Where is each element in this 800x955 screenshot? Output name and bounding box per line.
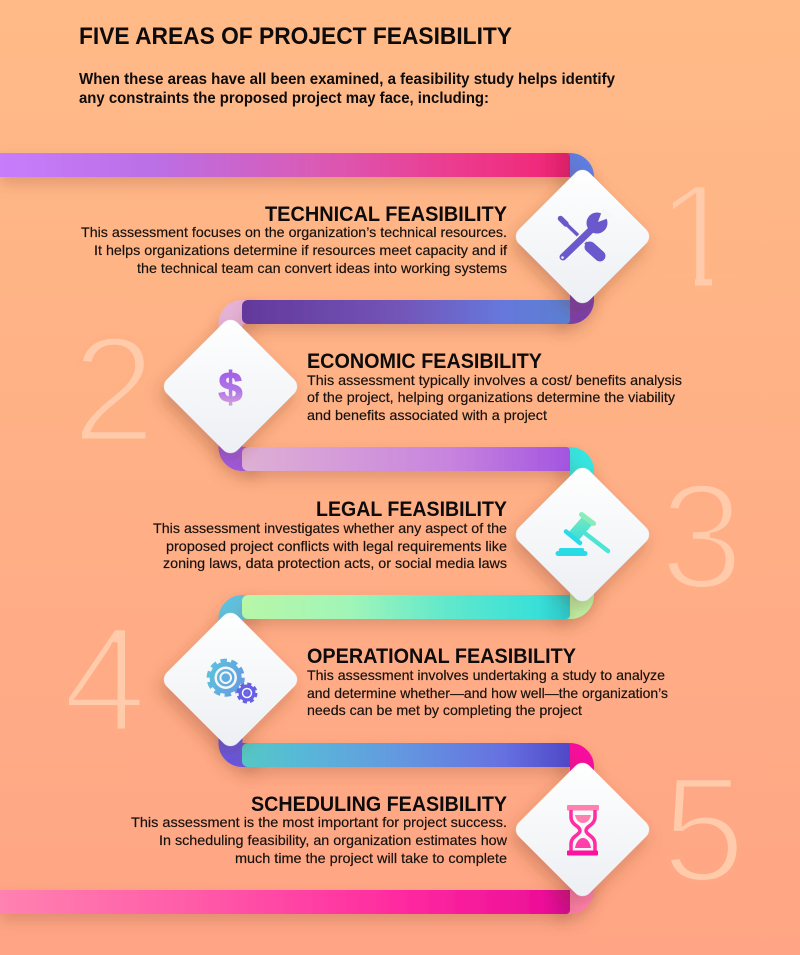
section 4: operational feasibility: and determine whether—and how well—the organization’s [307,685,668,701]
bar 6 [0,890,570,914]
bar 5 [242,743,570,767]
diamond card 2 [160,316,301,457]
section 1: technical feasibility: the technical team can convert ideas into working systems [137,260,507,276]
diamond card 5 [512,759,653,900]
section 3: legal feasibility [153,498,507,571]
section 5: scheduling feasibility: much time the project will take to complete [235,850,507,866]
section 1: technical feasibility [81,203,507,276]
section 5: scheduling feasibility: This assessment is the most important for project success. [131,814,507,830]
section 1: technical feasibility: TECHNICAL FEASIBILITY [265,203,507,226]
section 3: legal feasibility: proposed project conflicts with legal requirements like [166,538,507,554]
bar 3 [242,447,570,471]
section 1: technical feasibility: This assessment focuses on the organization’s technical resources. [81,224,507,240]
intro text: When these areas have all been examined, a feasibility study helps identify [79,71,615,88]
section 5: scheduling feasibility: In scheduling feasibility, an organization estimates how [159,832,508,848]
icon: wrench and screwdriver [560,208,614,259]
bar 1 [0,153,570,177]
number 1: 1 [656,152,739,320]
section 4: operational feasibility: needs can be met by completing the project [307,702,582,718]
section 2: economic feasibility [307,350,682,423]
section 3: legal feasibility: This assessment investigates whether any aspect of the [153,520,507,536]
intro text: any constraints the proposed project may face, including: [79,90,489,107]
section 2: economic feasibility: ECONOMIC FEASIBILITY [307,350,542,373]
section 2: economic feasibility: of the project, helping organizations determine the viability [307,389,675,405]
section 3: legal feasibility: LEGAL FEASIBILITY [316,498,507,521]
number 3: 3 [660,452,743,620]
section 1: technical feasibility: It helps organizations determine if resources meet capacity and if [94,242,507,258]
section 4: operational feasibility [307,645,668,718]
diamond card 3 [512,464,653,605]
bar 2 [242,300,570,324]
number 2: 2 [72,305,155,473]
icon: dollar sign: $ [219,364,243,412]
section 4: operational feasibility: This assessment involves undertaking a study to analyze [307,667,665,683]
section 5: scheduling feasibility [131,793,508,866]
intro text [79,71,615,107]
title: FIVE AREAS OF PROJECT FEASIBILITY [79,23,512,50]
ribbon path [0,153,582,914]
section 3: legal feasibility: zoning laws, data protection acts, or social media laws [163,555,507,571]
bar 4 [242,595,570,619]
connector corners [230,165,582,902]
number 5: 5 [662,745,745,913]
section 2: economic feasibility: This assessment typically involves a cost/ benefits analysis [307,372,682,388]
section 5: scheduling feasibility: SCHEDULING FEASIBILITY [251,793,507,816]
icon: hourglass [567,805,599,856]
diamond card 1 [512,166,653,307]
icon: gavel [556,514,608,556]
diamond card 4 [160,609,301,750]
icon: gears [208,660,256,702]
section 4: operational feasibility: OPERATIONAL FEASIBILITY [307,645,576,668]
section 2: economic feasibility: and benefits associated with a project [307,407,547,423]
number 4: 4 [63,595,146,763]
